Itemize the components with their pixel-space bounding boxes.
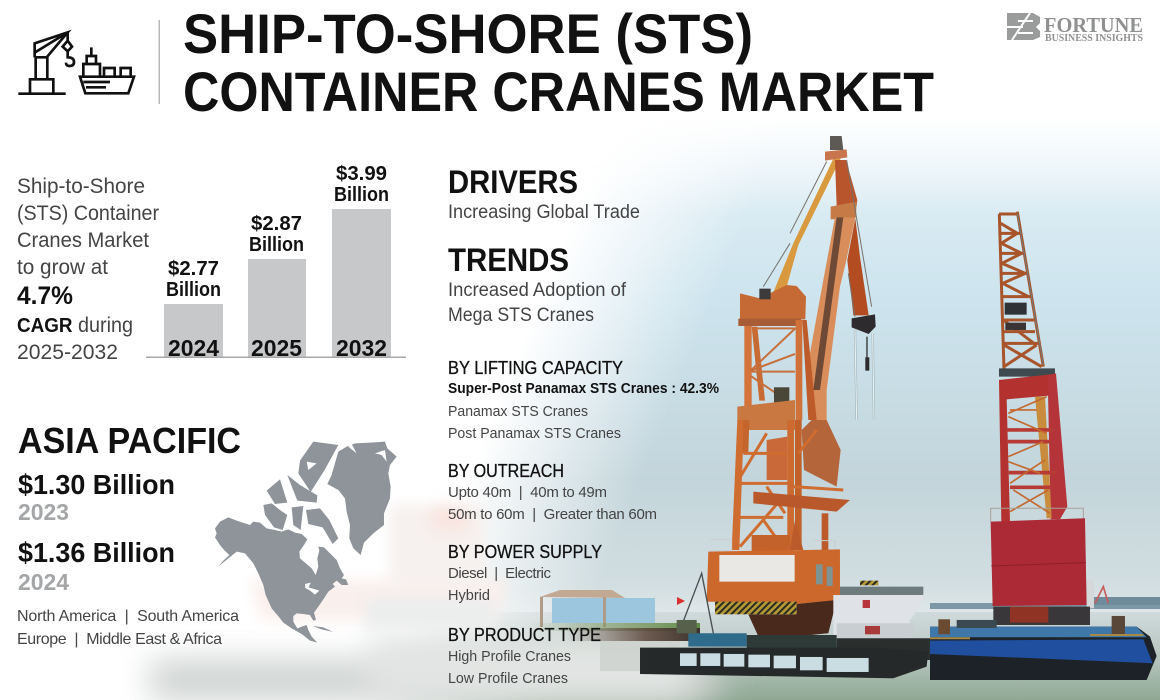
red counterweight box [991, 518, 1087, 606]
tall red crane on blue barge [930, 212, 1157, 680]
divider [158, 20, 160, 104]
Great Lakes and fjords [305, 583, 319, 595]
segment: by lifting capacity: Panamax STS Cranes [448, 403, 588, 420]
region list: North America | South America [17, 608, 239, 625]
segment: by product type [448, 625, 601, 687]
logo: Fortune Business Insights: FORTUNE [1044, 13, 1143, 37]
title: SHIP-TO-SHORE (STS) [183, 2, 753, 65]
map: North America and Greenland [215, 442, 397, 643]
market growth text: Ship-to-Shore [17, 175, 145, 198]
title [183, 2, 934, 123]
logo: Fortune Business Insights [1007, 13, 1143, 44]
market growth text: 4.7% [17, 282, 73, 310]
bar 2024: 2024 [168, 335, 219, 361]
red tower frame [991, 373, 1083, 522]
regional data: Asia Pacific [18, 420, 241, 595]
segment: by product type: BY PRODUCT TYPE [448, 625, 601, 645]
lattice boom [999, 212, 1043, 370]
segment: by power supply: Hybrid [448, 587, 490, 604]
segment: by outreach [448, 461, 657, 523]
segment: by power supply: BY POWER SUPPLY [448, 542, 602, 562]
icon: cargo ship [80, 47, 134, 93]
segment: by product type: High Profile Cranes [448, 648, 571, 665]
segment: by outreach: BY OUTREACH [448, 461, 564, 481]
market growth text [17, 175, 159, 364]
blue barge [930, 616, 1157, 680]
regional data: Asia Pacific: $1.30 Billion [18, 469, 175, 500]
bar 2032: 2032 [336, 335, 387, 361]
trends: Increased Adoption of [448, 280, 627, 301]
bar 2024: $2.77 [168, 258, 219, 280]
market growth text: to grow at [17, 256, 108, 279]
title: CONTAINER CRANES MARKET [183, 60, 934, 123]
drivers: Increasing Global Trade [448, 202, 640, 223]
large orange crane [640, 136, 930, 678]
regional data: Asia Pacific: $1.36 Billion [18, 537, 175, 568]
bar 2025: Billion [249, 234, 304, 256]
regional data: Asia Pacific: 2024 [18, 569, 69, 595]
market growth text: (STS) Container [17, 202, 159, 225]
segment: by lifting capacity: Super-Post Panamax STS Cranes : 42.3% [448, 381, 719, 397]
segment: by lifting capacity [448, 358, 719, 442]
Greenland [327, 442, 397, 555]
logo: Fortune Business Insights: BUSINESS INSIGHTS [1045, 33, 1143, 44]
bar 2025: $2.87 [251, 213, 302, 235]
regional data: Asia Pacific: ASIA PACIFIC [18, 420, 241, 461]
trends: Mega STS Cranes [448, 305, 594, 326]
crane boom and upper structure [737, 136, 876, 420]
segment: by power supply: Diesel | Electric [448, 565, 552, 582]
drivers [448, 164, 640, 223]
ghost ship faded behind the text [150, 505, 720, 700]
bar 2032: $3.99 [336, 163, 387, 185]
background photo: harbour with cranes [150, 100, 1160, 700]
regional data: Asia Pacific: 2023 [18, 499, 69, 525]
crane lower body and barge [640, 420, 930, 678]
drivers: DRIVERS [448, 164, 578, 200]
bar chart: market size 2024 to 2032 [146, 163, 406, 361]
icon: crane [18, 32, 74, 94]
bar 2025 [248, 213, 306, 361]
region list [17, 608, 239, 648]
bar 2024 [164, 258, 223, 361]
mainland [215, 517, 348, 643]
segment: by lifting capacity: BY LIFTING CAPACITY [448, 358, 623, 378]
bar 2024: Billion [166, 279, 221, 301]
segment: by product type: Low Profile Cranes [448, 670, 568, 687]
market growth text: Cranes Market [17, 229, 149, 252]
region list: Europe | Middle East & Africa [17, 631, 222, 648]
waterfront building [530, 590, 700, 671]
sky and water [434, 144, 1160, 700]
bar 2025: 2025 [251, 335, 302, 361]
distant shoreline [930, 597, 1160, 609]
segment: by outreach: 50m to 60m | Greater than 60m [448, 506, 657, 523]
segment: by lifting capacity: Post Panamax STS Cranes [448, 425, 621, 442]
market growth text: CAGR during [17, 314, 133, 337]
trends [448, 242, 627, 326]
segment: by power supply [448, 542, 602, 604]
segment: by outreach: Upto 40m | 40m to 49m [448, 484, 607, 501]
header icon: crane and cargo ship [18, 32, 134, 94]
bar 2032: Billion [334, 184, 389, 206]
market growth text: 2025-2032 [17, 341, 118, 364]
bar 2032 [332, 163, 391, 361]
trends: TRENDS [448, 242, 569, 278]
Arctic islands [263, 442, 338, 632]
